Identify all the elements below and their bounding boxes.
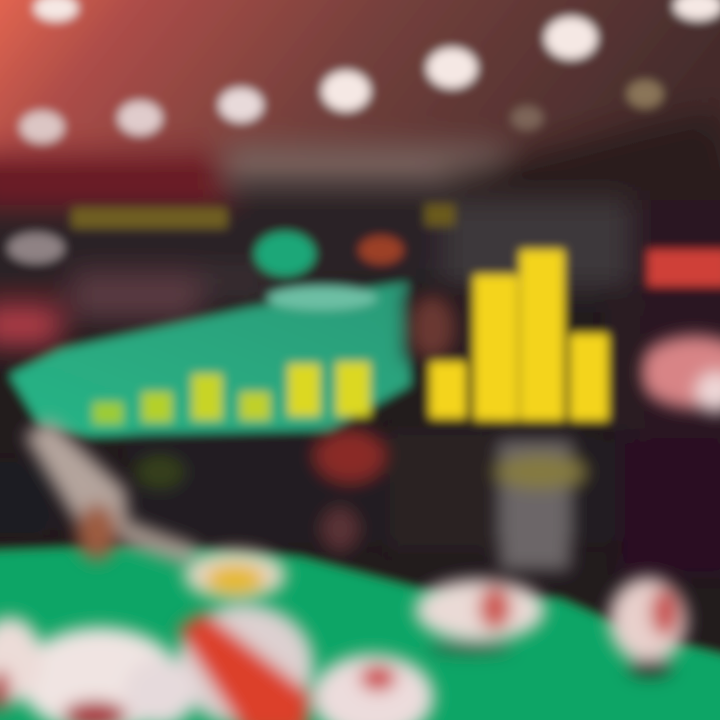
ball bottom center [313, 655, 433, 720]
ball large center [177, 605, 313, 720]
green pitch floor [0, 546, 720, 720]
ceiling lights [20, 0, 720, 143]
player leg [25, 420, 200, 566]
large bars [430, 250, 608, 420]
scoreboard signs [8, 204, 720, 286]
ball center right [416, 580, 544, 654]
ball right [610, 578, 686, 677]
lower dark crowd [0, 429, 720, 575]
right pink panel [637, 336, 720, 412]
green chart wedge [10, 282, 410, 436]
player silhouette [405, 290, 640, 430]
ball far left [0, 618, 42, 710]
yellow bar chart [93, 250, 608, 424]
ball bottom left [20, 628, 196, 720]
small bars [93, 362, 370, 424]
ball back center [185, 551, 285, 599]
footballs [0, 551, 686, 720]
dark stands band [0, 110, 720, 540]
